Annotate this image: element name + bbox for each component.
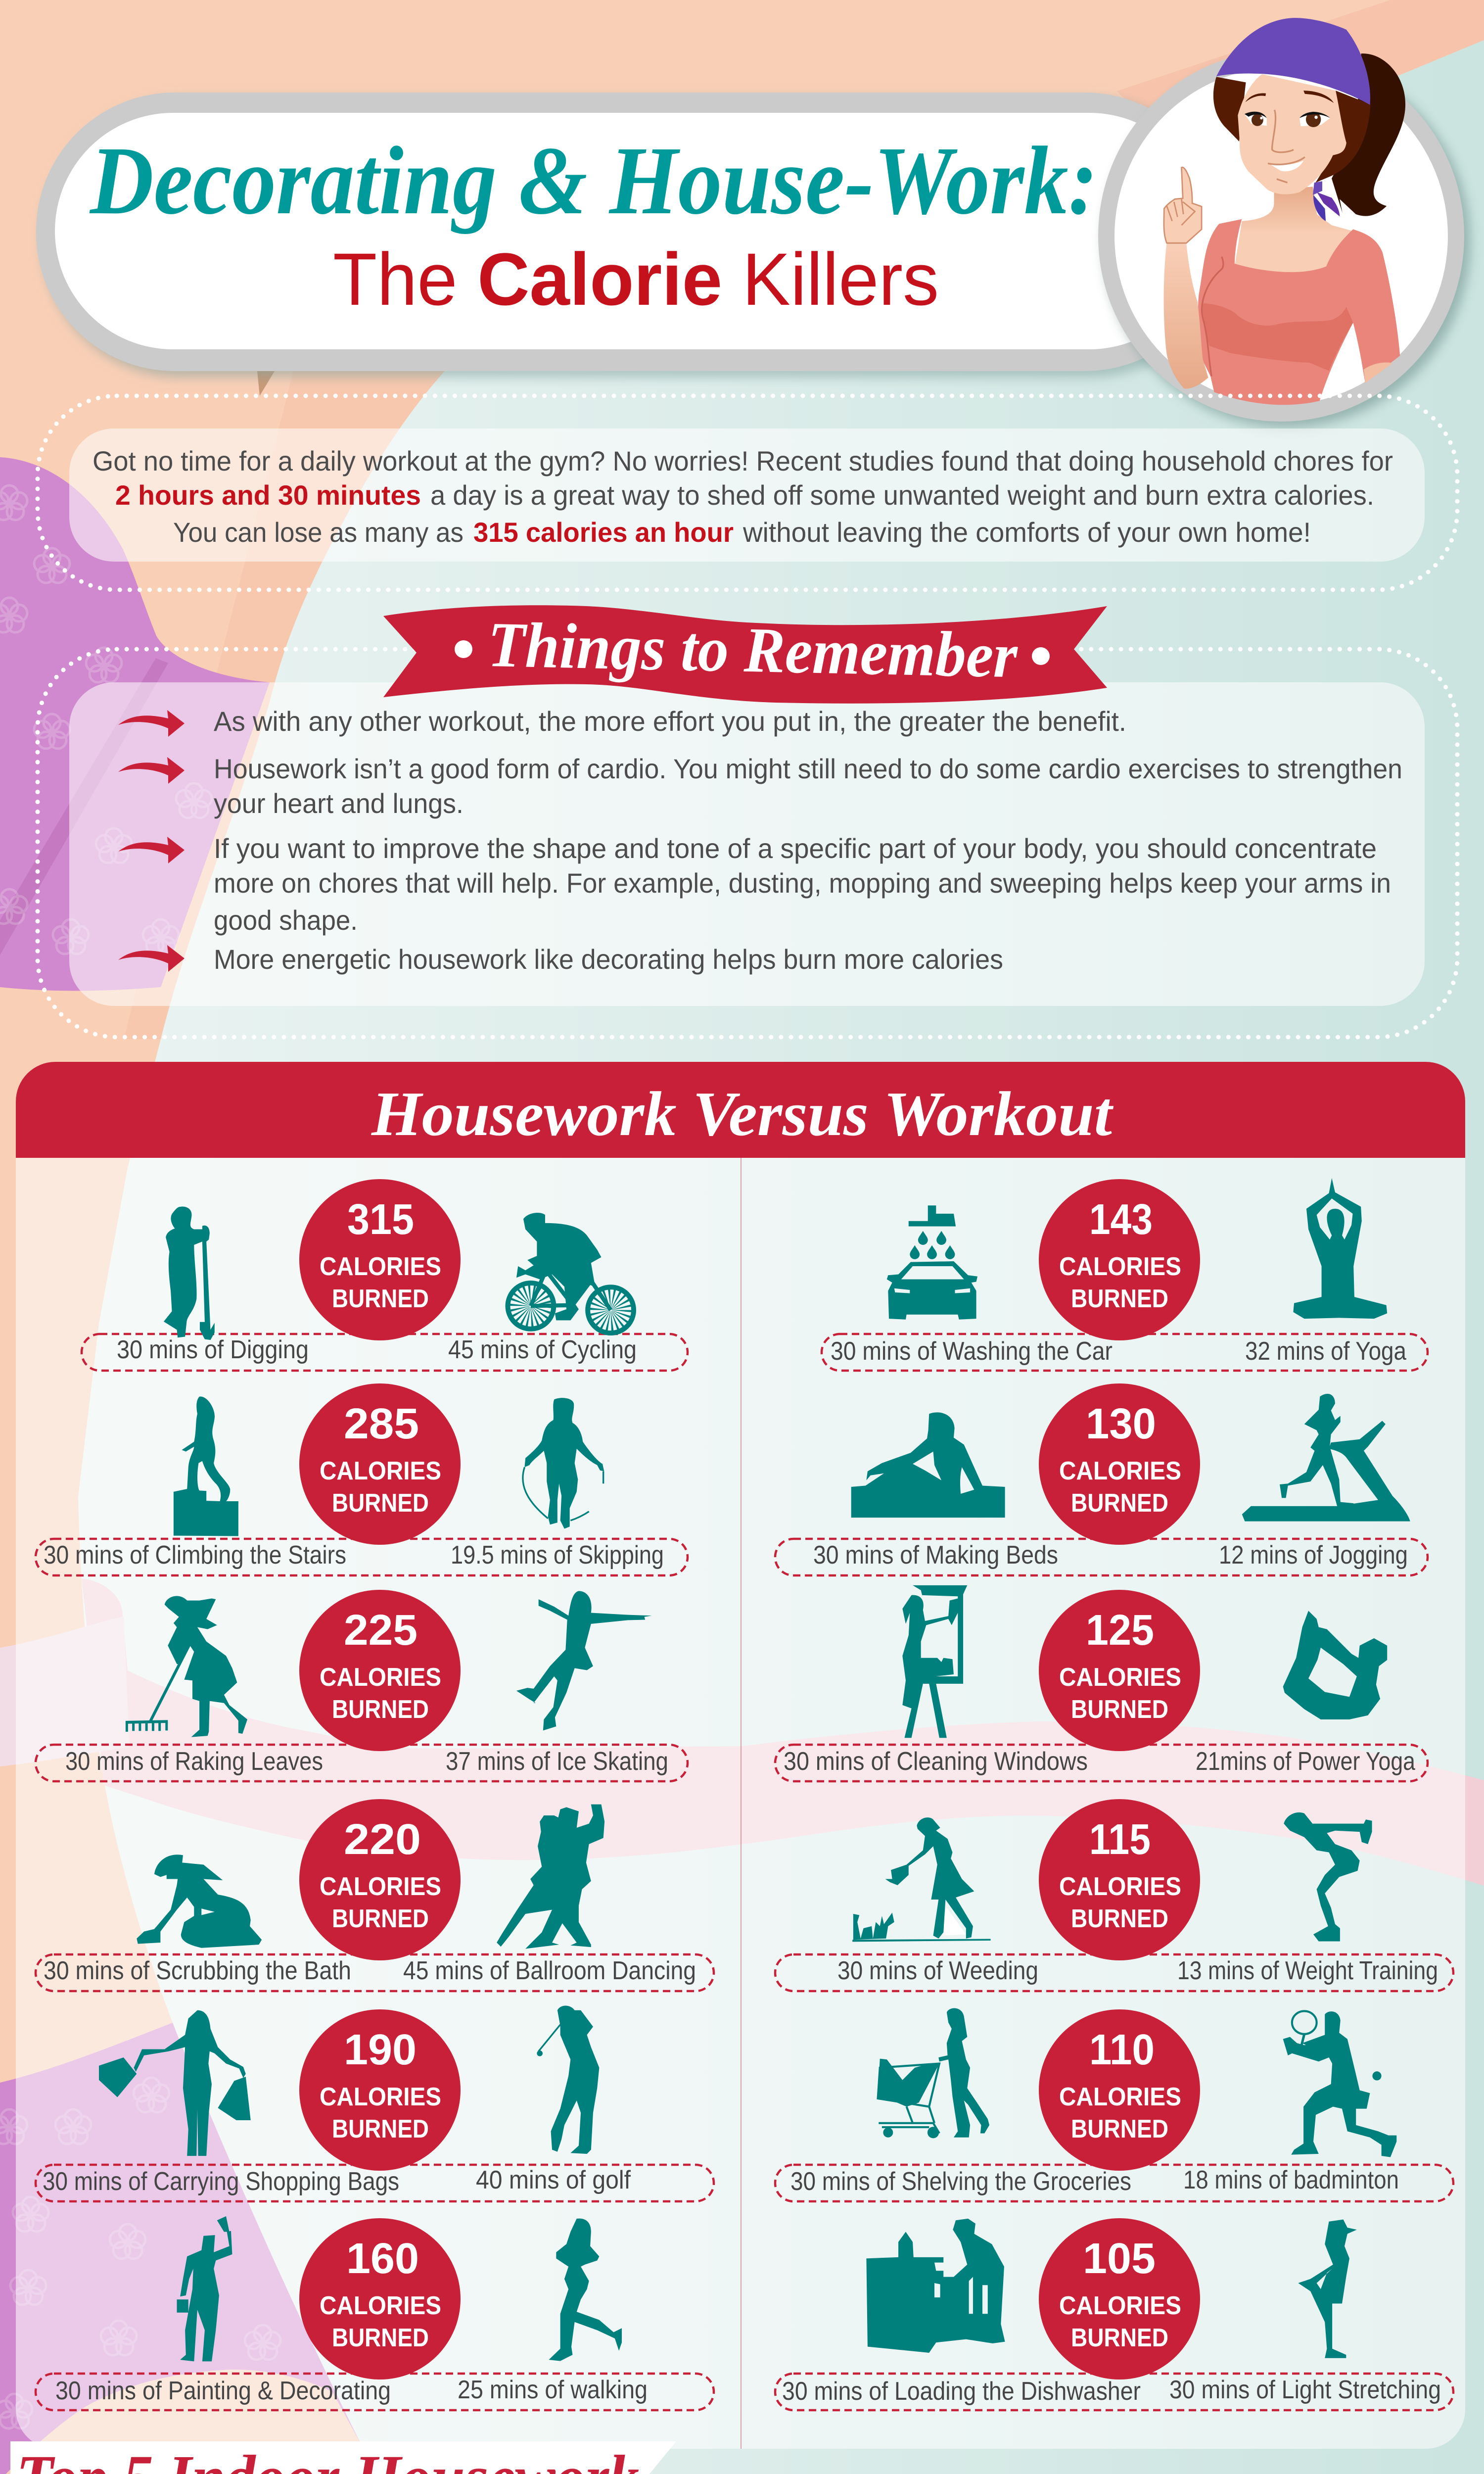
badge: 105 calories — [1039, 2218, 1200, 2379]
remember list text: your heart and lungs. — [214, 788, 464, 819]
row labels: 30 mins of Making Beds — [813, 1541, 1058, 1570]
remember list text: good shape. — [214, 904, 358, 936]
remember list text: Housework isn’t a good form of cardio. You might still need to do some cardio exercises to strengthen — [214, 753, 1402, 784]
row labels: 30 mins of Washing the Car — [831, 1337, 1113, 1366]
remember list text: If you want to improve the shape and tone of a specific part of your body, you should concentrate — [214, 833, 1377, 864]
row labels: 30 mins of Carrying Shopping Bags — [43, 2167, 399, 2196]
badge: 143 calories — [1039, 1179, 1200, 1340]
badge: 110 calories: BURNED — [1071, 2115, 1168, 2143]
icon: ice skating — [516, 1591, 651, 1730]
badge: 285 calories: CALORIES — [320, 1457, 441, 1485]
intro text: Got no time for a daily workout at the gym? No worries! Recent studies found that doing household chores for — [93, 445, 1393, 476]
row labels: 30 mins of Loading the Dishwasher — [782, 2377, 1141, 2406]
remember list text — [214, 706, 1402, 975]
badge: 160 calories: 160 — [346, 2235, 419, 2283]
badge: 125 calories — [1039, 1590, 1200, 1751]
intro text: a day is a great way to shed off some unwanted weight and burn extra calories. — [430, 479, 1374, 511]
icon: light stretching — [1298, 2220, 1357, 2358]
badge: 315 calories — [299, 1179, 461, 1340]
badge: 160 calories: BURNED — [332, 2324, 429, 2352]
row labels: 37 mins of Ice Skating — [446, 1747, 668, 1776]
badge: 315 calories: BURNED — [332, 1285, 429, 1313]
badge: 115 calories: 115 — [1089, 1815, 1151, 1863]
icon: cleaning windows — [902, 1585, 967, 1738]
badge: 115 calories: CALORIES — [1059, 1872, 1181, 1901]
row labels: 30 mins of Scrubbing the Bath — [44, 1956, 351, 1985]
badge: 220 calories: 220 — [344, 1815, 421, 1863]
icon: walking — [549, 2219, 622, 2361]
intro text: 2 hours and 30 minutes — [115, 479, 421, 511]
badge: 315 calories: 315 — [347, 1195, 414, 1243]
subtitle: The Calorie Killers — [333, 238, 939, 321]
badge: 315 calories: CALORIES — [320, 1252, 441, 1281]
badge: 105 calories: BURNED — [1071, 2324, 1168, 2352]
row labels: 12 mins of Jogging — [1219, 1541, 1408, 1570]
ribbon heading — [383, 605, 1107, 704]
row labels: 30 mins of Climbing the Stairs — [44, 1541, 346, 1570]
remember list text: more on chores that will help. For example, dusting, mopping and sweeping helps keep your arms in — [214, 867, 1391, 899]
arrow icons — [118, 710, 185, 972]
icon: making beds — [851, 1412, 1005, 1518]
badge: 225 calories: CALORIES — [320, 1663, 441, 1692]
row labels: 32 mins of Yoga — [1245, 1337, 1406, 1366]
ribbon heading: Things to Remember — [487, 609, 1019, 691]
row labels: 30 mins of Painting & Decorating — [55, 2377, 391, 2405]
icon: washing the car — [887, 1205, 977, 1320]
character portrait — [1098, 18, 1470, 428]
icon: digging — [164, 1207, 215, 1340]
icon: loading dishwasher — [866, 2219, 1005, 2353]
row labels: 30 mins of Raking Leaves — [65, 1747, 323, 1776]
panel: housework versus workout — [16, 1062, 1465, 2449]
remember list text: More energetic housework like decorating helps burn more calories — [214, 944, 1003, 975]
row labels: 13 mins of Weight Training — [1177, 1956, 1438, 1985]
badge: 220 calories — [299, 1799, 461, 1960]
badge: 115 calories — [1039, 1799, 1200, 1960]
badge: 190 calories: BURNED — [332, 2115, 429, 2143]
row labels: 30 mins of Digging — [117, 1335, 309, 1364]
dashed label pills — [36, 1334, 1453, 2410]
badge: 225 calories — [299, 1590, 461, 1751]
row labels: 30 mins of Weeding — [837, 1956, 1038, 1985]
row labels: 25 mins of walking — [458, 2376, 648, 2404]
badge: 143 calories: BURNED — [1071, 1285, 1168, 1313]
intro text: You can lose as many as — [173, 517, 464, 548]
badge: 225 calories: 225 — [344, 1606, 417, 1654]
icon: painting — [177, 2216, 232, 2361]
icon: badminton — [1283, 2011, 1396, 2157]
icon: weight training — [1284, 1812, 1372, 1942]
badge: 110 calories: CALORIES — [1059, 2083, 1181, 2111]
icon: weeding — [852, 1817, 991, 1942]
icon: yoga — [1293, 1178, 1387, 1319]
title banner — [36, 93, 1229, 377]
badge: 110 calories: 110 — [1089, 2026, 1155, 2074]
icon: cycling — [508, 1213, 634, 1333]
badge: 285 calories — [299, 1383, 461, 1545]
badge: 130 calories: 130 — [1086, 1400, 1156, 1448]
intro text — [93, 445, 1393, 548]
icon: climbing stairs — [174, 1396, 238, 1536]
row labels: 21mins of Power Yoga — [1196, 1747, 1415, 1776]
icon: shelving groceries — [878, 2008, 989, 2138]
icon: raking leaves — [126, 1596, 247, 1737]
panel: things to remember — [38, 605, 1457, 1037]
row labels: 19.5 mins of Skipping — [451, 1541, 664, 1570]
row labels: 40 mins of golf — [476, 2166, 631, 2194]
badge: 125 calories: BURNED — [1071, 1695, 1168, 1724]
icon: jogging on treadmill — [1242, 1394, 1410, 1522]
intro text: 315 calories an hour — [473, 517, 734, 548]
intro text: without leaving the comforts of your own home! — [742, 517, 1311, 548]
icon: ballroom dancing — [497, 1805, 604, 1949]
badge: 105 calories: 105 — [1083, 2235, 1156, 2283]
icon: skipping — [523, 1398, 604, 1529]
icon: golf — [537, 2005, 599, 2154]
row labels: 45 mins of Cycling — [448, 1335, 637, 1364]
badge: 125 calories: 125 — [1086, 1606, 1154, 1654]
row labels: 45 mins of Ballroom Dancing — [403, 1956, 696, 1985]
badge: 190 calories: CALORIES — [320, 2083, 441, 2111]
badge: 115 calories: BURNED — [1071, 1904, 1168, 1933]
badge: 130 calories: CALORIES — [1059, 1457, 1181, 1485]
panel heading: Housework Versus Workout — [371, 1079, 1114, 1149]
badge: 105 calories: CALORIES — [1059, 2291, 1181, 2320]
row labels: 30 mins of Light Stretching — [1169, 2376, 1441, 2404]
title heading: Decorating & House-Work: — [89, 126, 1098, 235]
icon: power yoga — [1283, 1611, 1387, 1719]
badge: 125 calories: CALORIES — [1059, 1663, 1181, 1692]
badge: 130 calories: BURNED — [1071, 1489, 1168, 1518]
row labels: 30 mins of Shelving the Groceries — [790, 2167, 1131, 2196]
badge: 190 calories: 190 — [344, 2026, 417, 2074]
panel: top 5 indoor housework — [10, 2441, 1415, 2474]
badge: 190 calories — [299, 2009, 461, 2171]
badge: 130 calories — [1039, 1383, 1200, 1545]
row labels: 30 mins of Cleaning Windows — [784, 1747, 1088, 1776]
badge: 220 calories: BURNED — [332, 1904, 429, 1933]
icon: scrubbing the bath — [137, 1855, 262, 1948]
panel: intro — [38, 396, 1457, 590]
row labels — [43, 1335, 1441, 2406]
badge: 143 calories: 143 — [1089, 1195, 1153, 1243]
badge: 220 calories: CALORIES — [320, 1872, 441, 1901]
badge: 143 calories: CALORIES — [1059, 1252, 1181, 1281]
icon: shopping bags — [99, 2010, 251, 2156]
badge: 110 calories — [1039, 2009, 1200, 2171]
badge: 285 calories: 285 — [344, 1400, 419, 1448]
badge: 285 calories: BURNED — [332, 1489, 429, 1518]
remember list text: As with any other workout, the more effort you put in, the greater the benefit. — [214, 706, 1126, 737]
badge: 225 calories: BURNED — [332, 1695, 429, 1724]
row labels: 18 mins of badminton — [1183, 2166, 1399, 2194]
badge: 160 calories: CALORIES — [320, 2291, 441, 2320]
badge: 160 calories — [299, 2218, 461, 2379]
